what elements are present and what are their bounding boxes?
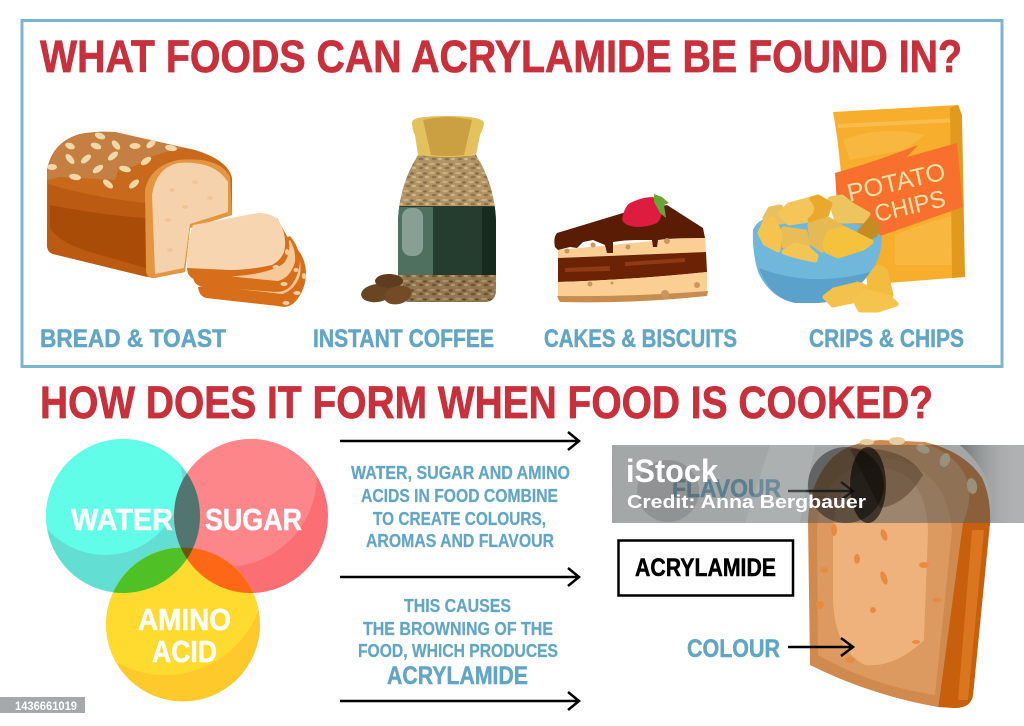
text block: combination: ACIDS IN FOOD COMBINE (361, 485, 558, 506)
text block: browning: ACRYLAMIDE (387, 662, 528, 690)
arrow: colour (788, 638, 853, 656)
panel: foods frame (22, 20, 1002, 366)
watermark band (612, 445, 1024, 523)
text: potato chips print (844, 158, 954, 233)
box: acrylamide: ACRYLAMIDE (635, 554, 776, 582)
chart: venn diagram: SUGAR (205, 502, 302, 537)
text block: combination (351, 462, 570, 551)
icon: loose chips (825, 267, 896, 310)
label: cakes and biscuits: CAKES & BISCUITS (544, 325, 737, 353)
text block: browning: FOOD, WHICH PRODUCES (358, 640, 558, 661)
text block: browning: THIS CAUSES (404, 595, 511, 616)
icon: cake slice (554, 194, 708, 302)
text block: browning: THE BROWNING OF THE (363, 618, 553, 639)
icon: bread slices (187, 213, 306, 307)
label: flavour: FLAVOUR (672, 475, 781, 503)
icon: chips in bowl (753, 197, 882, 303)
label: instant coffee: INSTANT COFFEE (313, 325, 494, 353)
arrow: middle (340, 568, 579, 586)
text block: combination: AROMAS AND FLAVOUR (366, 530, 554, 551)
icon: potato chips bag (833, 105, 965, 283)
text block: browning (358, 595, 558, 690)
label: colour: COLOUR (687, 635, 780, 663)
chart: venn diagram: AMINO (138, 602, 231, 637)
watermark: image id (0, 697, 85, 713)
chart: venn diagram: ACID (152, 634, 217, 669)
text: potato chips print: POTATO (844, 158, 948, 208)
text: potato chips print: CHIPS (872, 185, 948, 228)
arrow: flavour (788, 482, 853, 500)
text: iStock logo: iStock (626, 453, 718, 489)
text block: combination: WATER, SUGAR AND AMINO (351, 462, 570, 483)
text block: combination: TO CREATE COLOURS, (373, 508, 546, 529)
chart: venn diagram (46, 439, 328, 702)
icon: toast slice (808, 437, 990, 708)
arrow: top (340, 432, 579, 450)
icon: bread loaf (47, 131, 232, 278)
text: credit: Credit: Anna Bergbauer (627, 492, 866, 512)
label: bread and toast: BREAD & TOAST (40, 325, 226, 353)
label: crisps and chips: CRIPS & CHIPS (809, 325, 964, 353)
watermark: image id: 1436661019 (15, 699, 77, 713)
box: acrylamide (618, 540, 793, 596)
chart: venn diagram: WATER (71, 502, 173, 537)
icon: instant coffee jar (395, 116, 500, 305)
arrow: bottom (340, 692, 579, 710)
icon: coffee beans (360, 274, 414, 307)
